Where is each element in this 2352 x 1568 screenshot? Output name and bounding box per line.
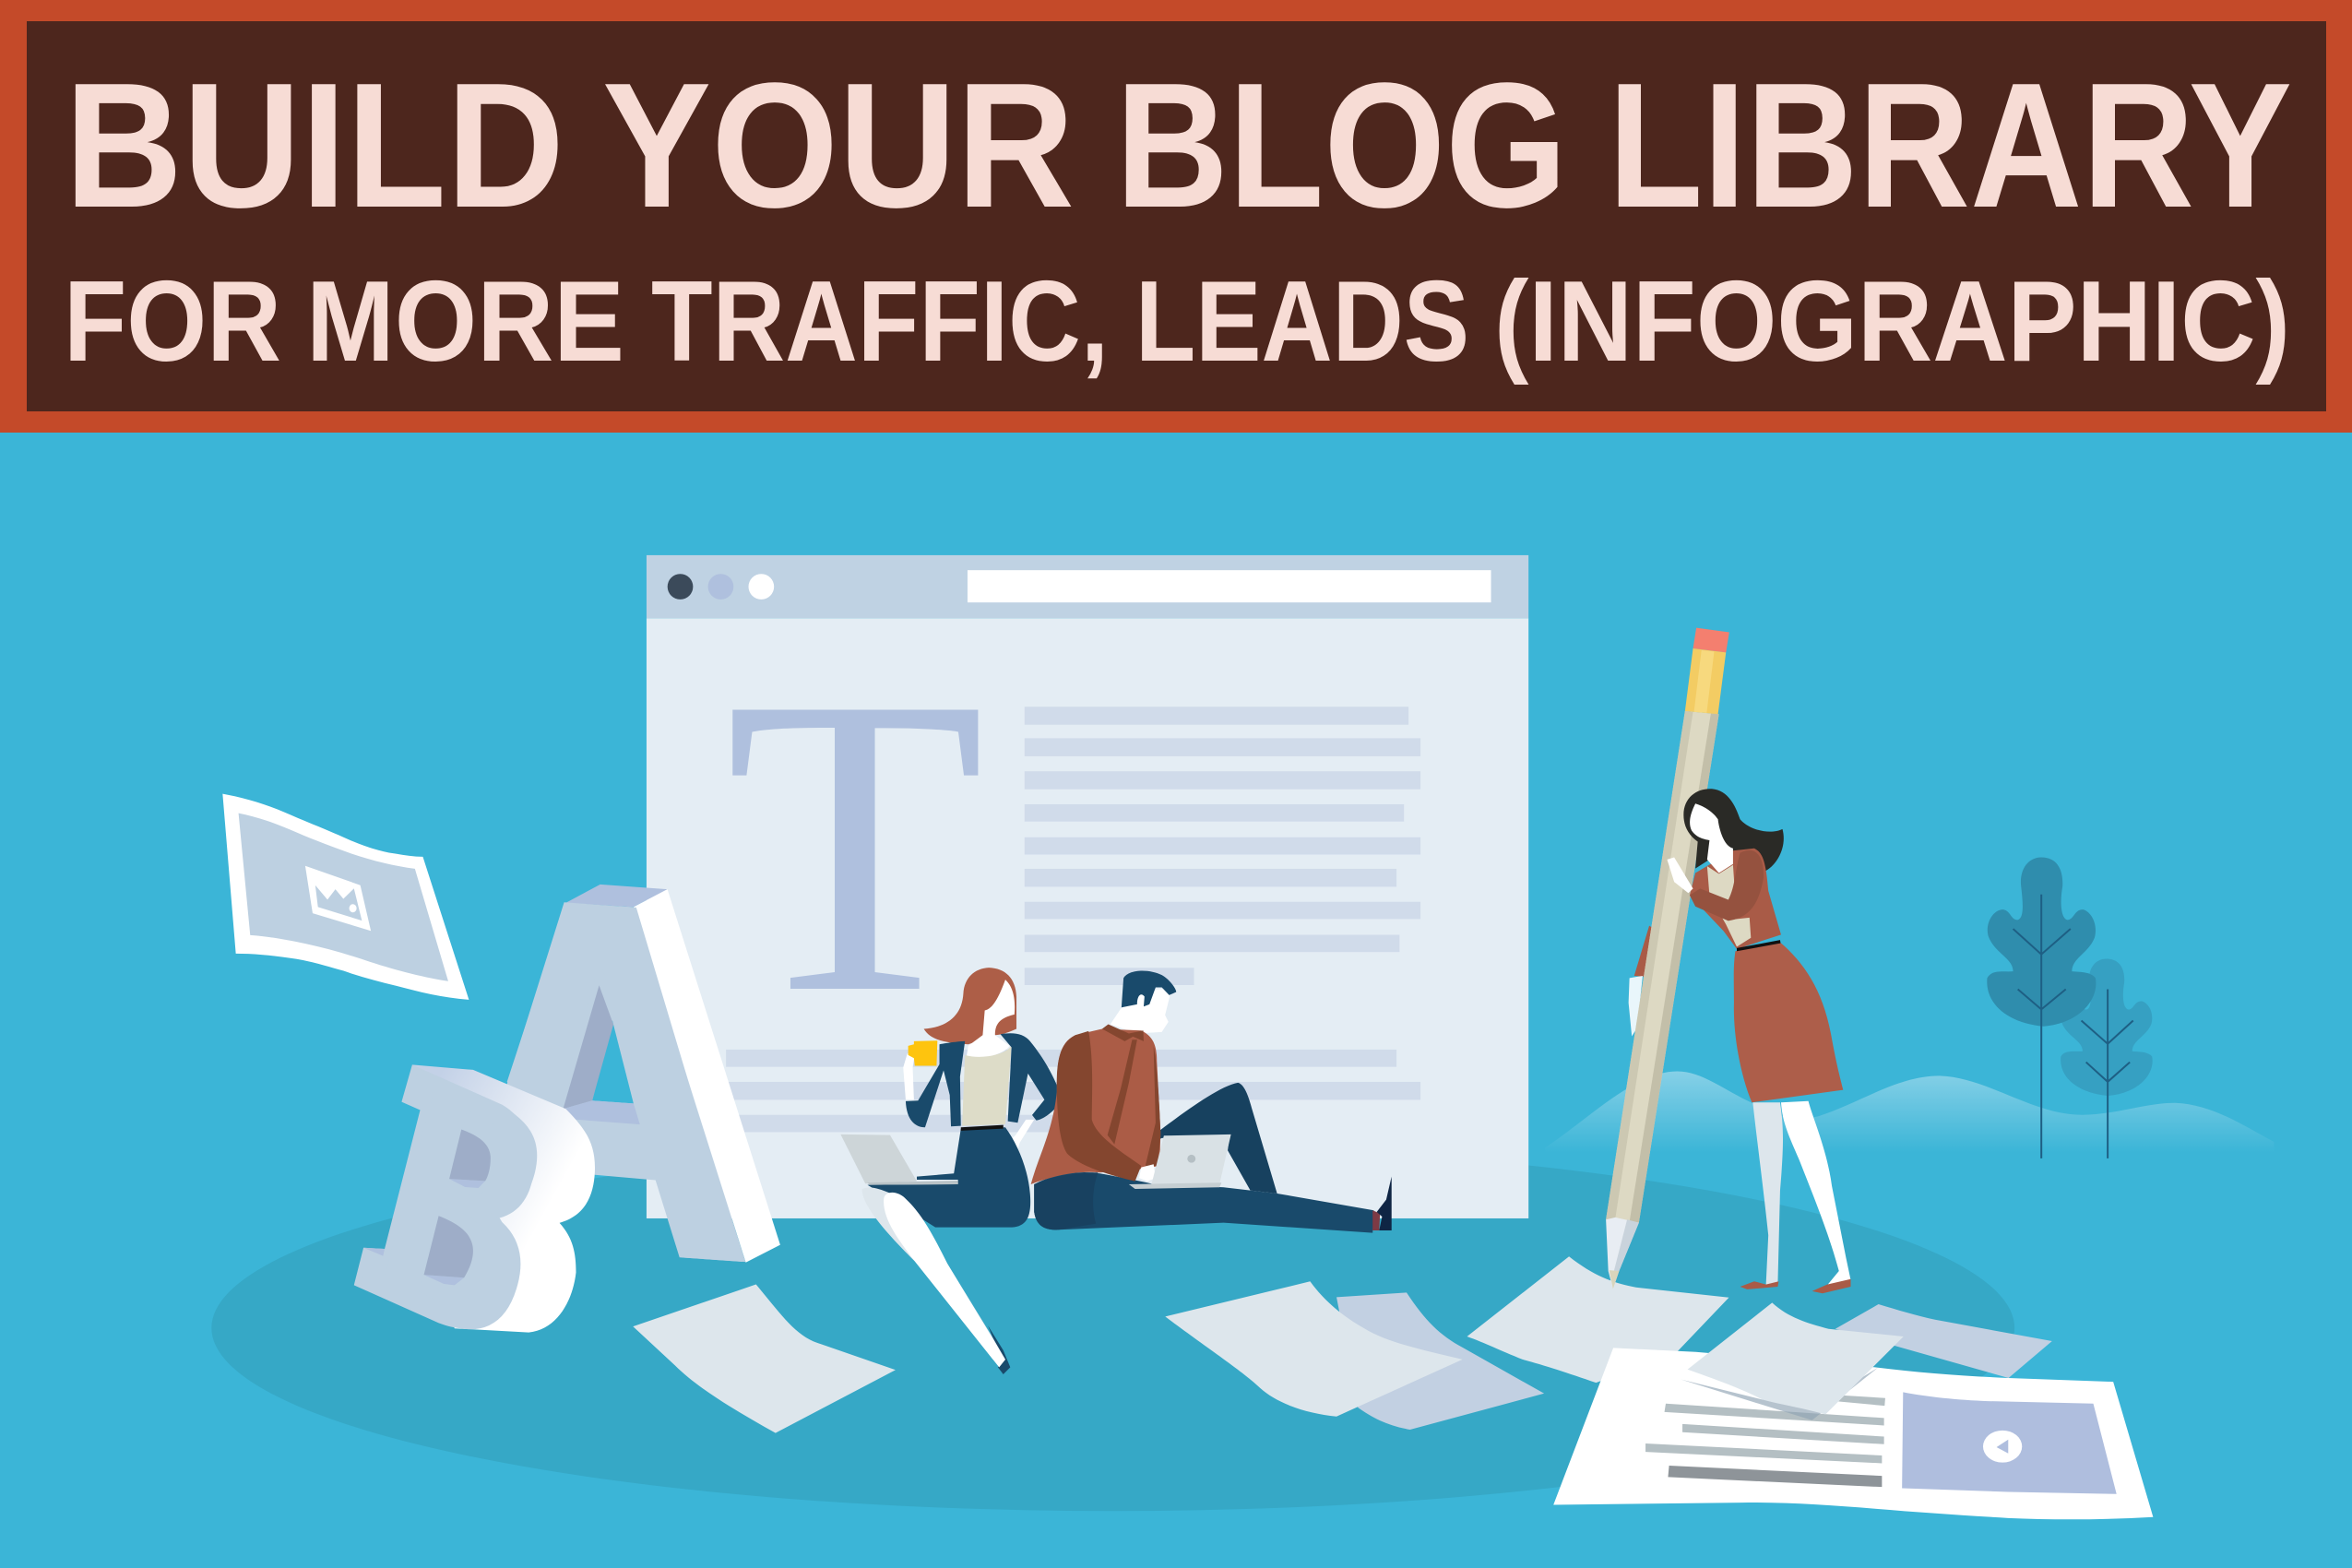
title line 1: YOUR <box>602 45 1075 244</box>
torso <box>1690 849 1781 949</box>
shirt side shade <box>1146 1046 1160 1166</box>
pencil <box>1606 628 1729 1289</box>
paper: left <box>633 1285 896 1433</box>
icon: mug <box>909 1040 937 1066</box>
pencil and standing woman <box>1606 628 1850 1293</box>
shoes <box>1740 1279 1850 1293</box>
floor ellipse <box>211 1145 2014 1511</box>
hair <box>1122 971 1176 1007</box>
belt <box>961 1125 1004 1131</box>
3D letter A <box>447 785 780 1371</box>
hand on hip <box>1006 1120 1034 1158</box>
pants <box>1034 1172 1374 1233</box>
A extrusion <box>565 885 780 1263</box>
title line 1: BUILD <box>65 45 564 244</box>
shoe <box>988 1325 1010 1374</box>
large letter T: T <box>725 609 985 1081</box>
shadow of small paper <box>1681 1367 1879 1420</box>
shoe <box>1377 1177 1392 1230</box>
floating image card <box>222 794 469 1000</box>
illustration scene <box>211 555 2274 1519</box>
B counters <box>363 1130 491 1285</box>
sock <box>1372 1210 1380 1230</box>
face and neck <box>1111 989 1170 1034</box>
title line 2: (INFOGRAPHIC) <box>1494 258 2290 386</box>
hand <box>1667 857 1693 893</box>
tree: front <box>1987 857 2096 1158</box>
paper: middle back <box>1336 1292 1544 1430</box>
title line 2: FOR <box>64 258 281 386</box>
shirt <box>1031 1029 1160 1184</box>
article line dark <box>1668 1466 1882 1487</box>
hand <box>1139 1164 1156 1182</box>
article lines <box>1645 1395 1885 1463</box>
A legs <box>507 903 745 1262</box>
paper: back right <box>1835 1304 2052 1378</box>
header banner <box>0 0 2352 433</box>
skirt <box>867 1127 1030 1228</box>
seated woman <box>840 968 1062 1374</box>
title line 2: LEADS <box>1135 258 1469 386</box>
title line 2: MORE <box>306 258 624 386</box>
face and neck <box>1690 803 1733 873</box>
B outline <box>354 1064 534 1328</box>
back leg <box>862 1187 1005 1360</box>
arm <box>1690 850 1764 921</box>
white article sheet <box>1553 1348 2153 1519</box>
back hand <box>1629 976 1646 1036</box>
distant hills <box>1545 1072 2274 1152</box>
collar <box>1102 1025 1144 1041</box>
title line 1: BLOG <box>1116 45 1567 244</box>
A inner opening <box>564 985 640 1124</box>
paper: middle front <box>1165 1281 1463 1417</box>
arm holding mug <box>903 1053 915 1099</box>
icon: picture <box>305 866 371 931</box>
laptop <box>840 1134 917 1183</box>
jacket right side <box>1001 1033 1062 1123</box>
A face: A <box>447 785 754 1371</box>
title line 2: TRAFFIC, <box>651 258 1109 386</box>
skirt <box>1734 943 1843 1102</box>
blouse <box>1707 865 1751 946</box>
seated man <box>1031 971 1392 1233</box>
hair <box>1683 789 1784 871</box>
sleeve <box>1057 1031 1141 1182</box>
hair <box>924 968 1016 1044</box>
tree: back <box>2061 959 2153 1158</box>
B extrusion <box>412 1064 595 1333</box>
back arm <box>1634 926 1657 977</box>
paper: small floating <box>1688 1302 1904 1414</box>
jacket <box>906 1041 965 1127</box>
back leg <box>1752 1102 1783 1285</box>
hip shade <box>1034 1172 1098 1229</box>
browser top bar <box>647 555 1528 618</box>
3D letter B <box>338 991 595 1423</box>
front leg <box>884 1193 1005 1367</box>
title line 1 <box>65 45 2292 244</box>
browser window <box>647 555 1528 1218</box>
placket <box>1108 1039 1137 1145</box>
title line 2 <box>64 258 2290 386</box>
video panel <box>1902 1392 2117 1494</box>
icon: play <box>1983 1431 2022 1463</box>
front leg <box>1781 1101 1850 1286</box>
belt <box>1737 940 1780 951</box>
text lines: lower <box>726 1050 1420 1132</box>
paper: under pencil <box>1467 1256 1728 1383</box>
text lines: right column <box>1025 707 1420 985</box>
laptop <box>1151 1134 1231 1184</box>
face and neck <box>967 980 1015 1058</box>
top <box>962 1046 1012 1126</box>
B face: B <box>338 991 586 1423</box>
raised leg <box>1124 1083 1277 1194</box>
